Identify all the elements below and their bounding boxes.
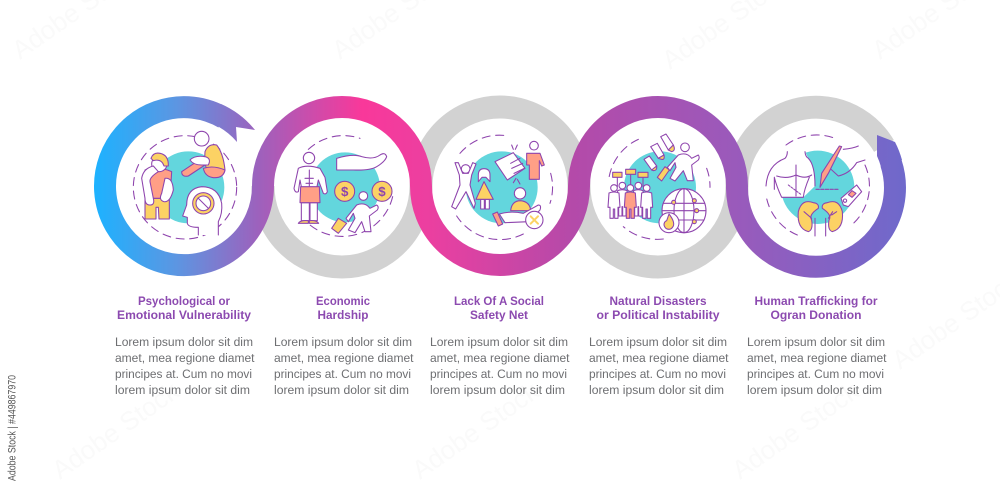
stock credit: Adobe Stock | #449867970: [6, 375, 18, 481]
icon: lack of social safety net: [452, 135, 553, 240]
column 1 heading: Emotional Vulnerability: [117, 308, 251, 322]
column 4 heading: or Political Instability: [596, 308, 720, 322]
column 5 text: [747, 335, 887, 397]
column 2 text: [274, 335, 414, 397]
column 1 text: principes at. Cum no movi: [115, 367, 252, 381]
column 2 text: lorem ipsum dolor sit dim: [274, 383, 409, 397]
column 5 heading: Ogran Donation: [770, 308, 862, 322]
icon: economic hardship: $: [341, 184, 349, 199]
icon: psychological vulnerability: [133, 131, 237, 239]
column 2 heading: [316, 294, 370, 322]
column 1 text: Lorem ipsum dolor sit dim: [115, 335, 253, 349]
icon: organ trafficking: [766, 135, 869, 236]
column 3 heading: Safety Net: [470, 308, 528, 322]
column 4 text: amet, mea regione diamet: [589, 351, 729, 365]
column 1 heading: [117, 294, 251, 322]
column 3 text: [430, 335, 570, 397]
column 3 text: principes at. Cum no movi: [430, 367, 567, 381]
column 4 text: lorem ipsum dolor sit dim: [589, 383, 724, 397]
icon: natural disasters and instability: [608, 134, 710, 239]
column 1 text: amet, mea regione diamet: [115, 351, 255, 365]
watermark: Adobe Stock: [726, 375, 865, 485]
column 4 text: [589, 335, 729, 397]
column 5 text: principes at. Cum no movi: [747, 367, 884, 381]
column 2 text: amet, mea regione diamet: [274, 351, 414, 365]
column 2 heading: Hardship: [318, 308, 368, 322]
column 3 text: lorem ipsum dolor sit dim: [430, 383, 565, 397]
column 5 heading: Human Trafficking for: [754, 294, 878, 308]
watermark: Adobe Stock: [46, 375, 185, 485]
column 3 text: amet, mea regione diamet: [430, 351, 570, 365]
watermark: Adobe Stock: [406, 375, 545, 485]
column 4 text: principes at. Cum no movi: [589, 367, 726, 381]
column 5 text: amet, mea regione diamet: [747, 351, 887, 365]
gradient ribbon: [105, 104, 902, 267]
column 5 text: Lorem ipsum dolor sit dim: [747, 335, 885, 349]
column 3 text: Lorem ipsum dolor sit dim: [430, 335, 568, 349]
ribbon tail: [877, 135, 902, 167]
column 3 heading: Lack Of A Social: [454, 294, 544, 308]
column 4 heading: [596, 294, 720, 322]
column 5 text: lorem ipsum dolor sit dim: [747, 383, 882, 397]
column 1 text: [115, 335, 255, 397]
column 4 text: Lorem ipsum dolor sit dim: [589, 335, 727, 349]
arrow head: [219, 104, 255, 142]
column 1 heading: Psychological or: [138, 294, 230, 308]
column 2 text: principes at. Cum no movi: [274, 367, 411, 381]
icon: economic hardship: $: [378, 184, 386, 199]
column 2 heading: Economic: [316, 294, 370, 308]
grey ribbon: [263, 107, 884, 267]
column 1 text: lorem ipsum dolor sit dim: [115, 383, 250, 397]
column 3 heading: [454, 294, 544, 322]
column 4 heading: Natural Disasters: [610, 294, 707, 308]
column 5 heading: [754, 294, 878, 322]
column 2 text: Lorem ipsum dolor sit dim: [274, 335, 412, 349]
icon: economic hardship: [294, 136, 393, 236]
